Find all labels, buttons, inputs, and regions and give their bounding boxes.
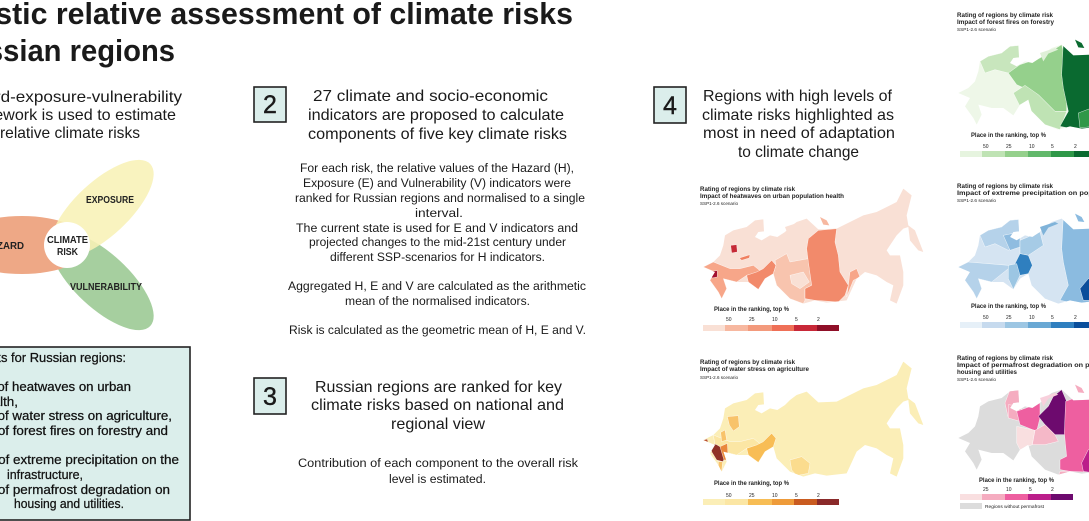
map title: SSP1-2.6 scenario [700,201,738,206]
number box 3 [254,378,286,414]
number box 3: 3 [263,383,277,411]
map title: Rating of regions by climate risk [700,186,795,193]
step 3 body text: Contribution of each component to the overall risk [298,456,579,470]
islands: forest map [1040,40,1084,61]
step 4 heading: to climate change [738,144,859,161]
legend: 50 [726,493,732,499]
step 4 heading: Regions with high levels of [703,88,893,105]
step 2 body text: Aggregated H, E and V are calculated as the arithmetic [288,279,586,293]
map of regions [958,218,1089,304]
key risks list: housing and utilities. [14,496,124,511]
legend: 50 [983,144,989,150]
map title: Rating of regions by climate risk [957,355,1053,362]
step 2 body text: ranked for Russian regions and normalised to a single [295,191,585,205]
legend: 25 [1006,144,1012,150]
step 2 body text: For each risk, the relative values of the Hazard (H), [300,161,574,175]
legend: Place in the ranking, top % [971,303,1046,310]
legend: 5 [795,493,798,499]
legend [960,477,1073,509]
diagram labels: RISK [57,247,79,258]
legend: 50 [726,317,732,323]
diagram labels [0,195,142,293]
step 4 heading [702,88,895,161]
legend: Place in the ranking, top % [714,480,789,487]
legend: Place in the ranking, top % [714,306,789,313]
islands: precipitation map [1040,214,1084,235]
map title: Rating of regions by climate risk [957,12,1053,19]
diagram labels: EXPOSURE [86,195,134,206]
petal: vulnerability [35,216,169,346]
map of regions [958,390,1089,474]
map title: SSP1-2.6 scenario [700,375,738,380]
step 3 body text [298,456,579,486]
diagram labels: VULNERABILITY [70,282,142,293]
legend: 10 [1029,315,1035,321]
step 2 body text: Risk is calculated as the geometric mean of H, E and V. [289,323,586,337]
step 2 body text: interval. [415,206,463,220]
legend: 5 [1029,487,1032,493]
legend: 50 [983,315,989,321]
map title: housing and utilities [957,369,1017,376]
map title [957,183,1089,203]
step 4 heading: climate risks highlighted as [702,107,894,124]
legend: 5 [1051,315,1054,321]
legend: 10 [1029,144,1035,150]
step 3 heading [311,379,564,433]
number box 4: 4 [663,92,677,120]
legend: 10 [772,317,778,323]
legend: 25 [1006,315,1012,321]
legend: 5 [1051,144,1054,150]
key risks list [0,350,179,511]
map title [957,12,1054,32]
risk framework diagram [0,144,169,346]
map title [700,186,844,206]
legend: 10 [1006,487,1012,493]
legend: 2 [1051,487,1054,493]
map title: Impact of heatwaves on urban population health [700,193,844,200]
map title [957,355,1089,382]
legend: Place in the ranking, top % [979,477,1054,484]
step 2 body text: different SSP-scenarios for H indicators. [330,250,545,264]
step 3 heading: regional view [391,416,486,433]
map of regions [704,362,924,476]
petal: exposure [35,144,169,274]
legend [960,303,1089,328]
legend: 2 [817,493,820,499]
key risks box [0,347,190,520]
legend: 5 [795,317,798,323]
legend: Place in the ranking, top % [971,132,1046,139]
map of regions [704,188,924,304]
legend: Regions without permafrost [985,504,1045,509]
legend [960,132,1089,157]
legend: 10 [772,493,778,499]
step 2 body text: Exposure (E) and Vulnerability (V) indicators were [303,176,571,190]
step 2 heading [308,88,567,143]
step 3 heading: Russian regions are ranked for key [315,379,562,396]
title [0,0,573,68]
legend: 25 [749,317,755,323]
step 2 body text: projected changes to the mid-21st century under [309,235,566,249]
number box 2: 2 [263,91,277,119]
step 2 body text: mean of the normalised indicators. [345,294,530,308]
number box 4 [654,87,686,123]
legend: 2 [817,317,820,323]
step 1 heading [0,89,182,142]
map panel: heatwaves on urban population health [700,186,924,331]
map title: Rating of regions by climate risk [700,359,795,366]
step 2 heading: components of five key climate risks [308,126,567,143]
map title: Impact of water stress on agriculture [700,366,809,373]
legend: 25 [749,493,755,499]
islands: permafrost map [1040,385,1084,406]
map panel: forest fires on forestry [957,12,1089,157]
step 2 body text [288,161,586,337]
key risks list: infrastructure, [7,467,83,482]
number box 2 [254,87,286,122]
centre circle: climate risk [44,222,90,268]
diagram labels: CLIMATE [47,235,88,246]
step 3 heading: climate risks based on national and [311,397,564,414]
map title: Impact of forest fires on forestry [957,19,1054,26]
legend: 2 [1074,315,1077,321]
map title [700,359,809,380]
step 4 heading: most in need of adaptation [703,125,895,142]
islands: heatwaves map [785,217,829,235]
map title: Rating of regions by climate risk [957,183,1053,190]
legend: 25 [983,487,989,493]
map title: SSP1-2.6 scenario [957,198,996,203]
map panel: extreme precipitation on population [957,184,1089,328]
step 2 heading: 27 climate and socio-economic [313,88,548,105]
legend [703,480,839,505]
map panel: water stress on agriculture [700,360,924,505]
map of regions [958,44,1089,130]
step 2 body text: The current state is used for E and V indicators and [296,221,578,235]
legend: 2 [1074,144,1077,150]
step 3 body text: level is estimated. [389,472,486,486]
step 2 heading: indicators are proposed to calculate [308,107,564,124]
step 1 heading: relative climate risks [0,125,140,142]
map title: SSP1-2.6 scenario [957,27,996,32]
map title: SSP1-2.6 scenario [957,377,996,382]
petal: hazard [0,216,90,274]
map panel: permafrost degradation [957,356,1089,509]
legend [703,306,839,331]
